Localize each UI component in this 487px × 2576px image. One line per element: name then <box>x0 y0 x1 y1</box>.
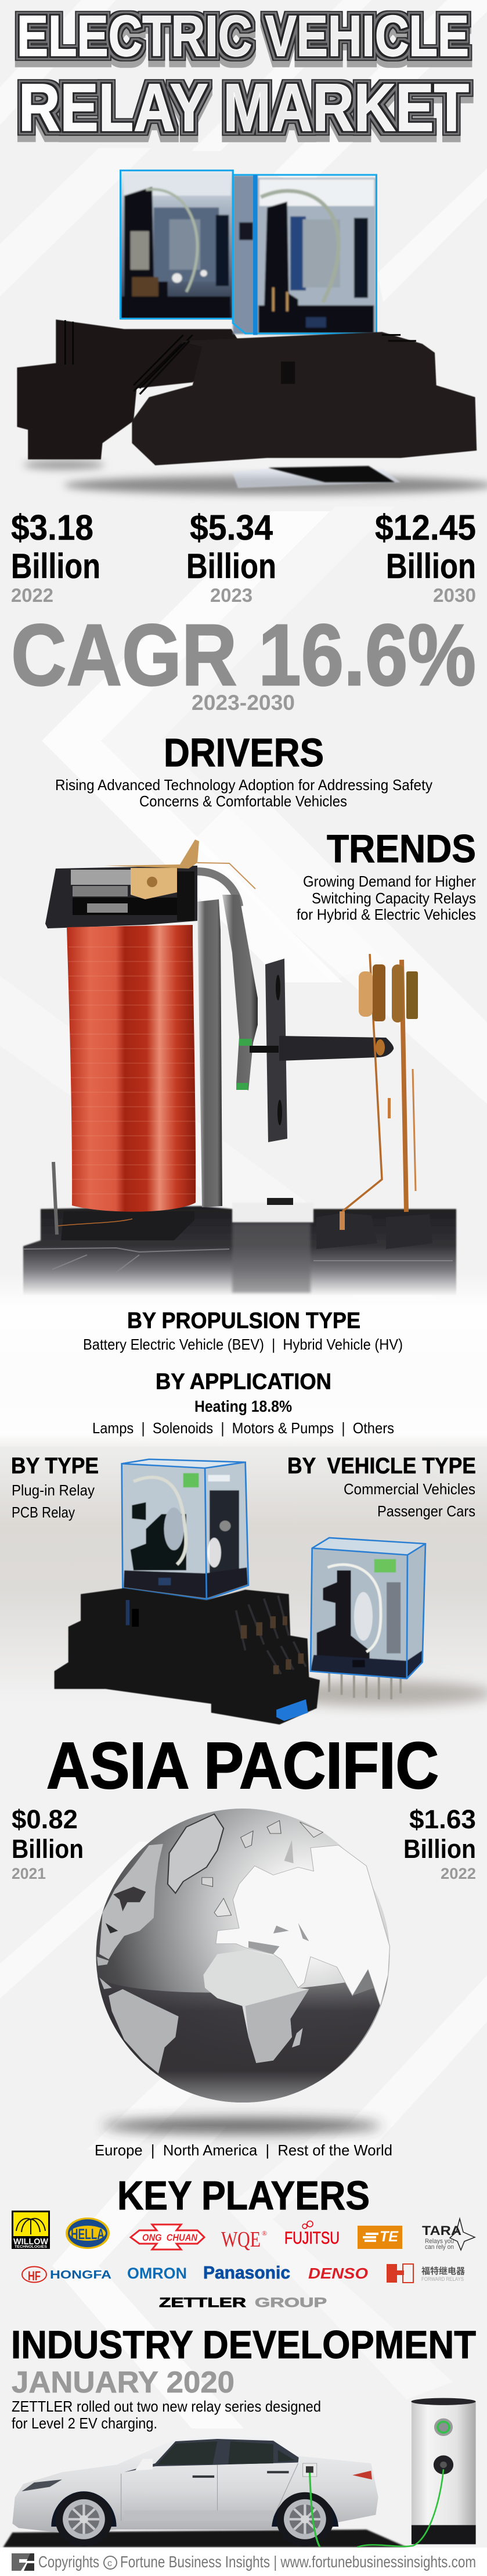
logo: Willow: TECHNOLOGIES <box>15 2245 47 2249</box>
stat: 2030 <box>375 508 476 606</box>
logo: Tara: TARA <box>422 2223 461 2238</box>
image: opened relay coil <box>23 839 456 1295</box>
globe <box>96 1809 390 2133</box>
logo: Fujitsu: FUJITSU <box>284 2229 340 2248</box>
stat: 2022 <box>11 508 100 606</box>
logo: Tara <box>422 2219 475 2251</box>
region heading: ASIA PACIFIC <box>46 1729 439 1802</box>
drivers: Rising Advanced Technology Adoption for Addressing Safety <box>55 776 432 794</box>
trends: TRENDS <box>327 827 476 871</box>
logo: TE <box>358 2226 402 2249</box>
logo: Hella: HELLA <box>71 2226 104 2243</box>
industry development <box>11 2323 476 2432</box>
illustration: car at charger <box>3 2398 476 2547</box>
logo: Willow: WILLOW <box>13 2237 49 2247</box>
footer: c <box>107 2559 112 2568</box>
logo: Zettler Group: GROUP <box>255 2295 327 2310</box>
stat: 2023: $5.34 <box>190 508 273 547</box>
image: two relays on sockets <box>17 170 487 494</box>
logo: Tara: can rely on <box>425 2244 454 2251</box>
industry development: for Level 2 EV charging. <box>12 2414 157 2432</box>
stat: region 2021: $0.82 <box>12 1804 78 1834</box>
logo: Fujitsu <box>284 2221 340 2248</box>
by application: Lamps | Solenoids | Motors & Pumps | Others <box>92 1419 394 1437</box>
stat: 2022: 2022 <box>11 584 53 606</box>
by type: PCB Relay <box>12 1504 75 1521</box>
Eurasia <box>216 1845 389 2006</box>
trends: Growing Demand for Higher <box>303 873 476 890</box>
stat: region 2022: Billion <box>403 1834 476 1864</box>
by application: Heating 18.8% <box>194 1397 292 1415</box>
stat: 2030: $12.45 <box>375 508 476 547</box>
logo: Forward Relays: FORWARD RELAYS <box>421 2276 464 2283</box>
logo: TE: TE <box>380 2229 399 2245</box>
trends: for Hybrid & Electric Vehicles <box>297 906 476 923</box>
CAGR: 2023-2030 <box>192 691 295 715</box>
Greenland <box>168 1814 223 1893</box>
trends <box>297 827 476 923</box>
charger <box>412 2402 476 2527</box>
large relay <box>122 1459 248 1599</box>
front socket <box>132 332 477 465</box>
stat: 2022: Billion <box>11 547 100 586</box>
by propulsion type: Battery Electric Vehicle (BEV) | Hybrid Vehicle (HV) <box>83 1336 403 1353</box>
plate <box>265 959 287 1142</box>
drivers <box>55 730 432 810</box>
logo: Hongfa: HF <box>28 2269 41 2283</box>
cable <box>357 2469 443 2547</box>
iron yoke <box>197 899 222 1207</box>
title <box>17 3 469 145</box>
Central America <box>97 1957 112 1989</box>
logo: Omron: OMRON <box>127 2265 187 2282</box>
by type: Plug-in Relay <box>12 1481 95 1499</box>
by propulsion type <box>83 1308 403 1353</box>
logo: Panasonic: Panasonic <box>203 2262 290 2283</box>
pin <box>250 1046 279 1053</box>
copper coil <box>67 925 196 1212</box>
drivers: DRIVERS <box>164 730 324 775</box>
trends: Switching Capacity Relays <box>312 889 476 907</box>
regions list: Europe | North America | Rest of the World <box>95 2141 392 2159</box>
logo: Zettler Group: ZETTLER <box>159 2295 247 2310</box>
wheels <box>51 2491 338 2527</box>
logo: Forward Relays: 福特继电器 <box>421 2266 465 2276</box>
right relay <box>233 175 376 335</box>
key players heading: KEY PLAYERS <box>117 2173 370 2218</box>
stat: region 2021 <box>12 1804 84 1882</box>
North America <box>99 1844 163 1959</box>
stat: region 2021: Billion <box>12 1834 84 1864</box>
by application <box>92 1369 394 1437</box>
by vehicle type <box>287 1454 476 1520</box>
logo: Hongfa <box>22 2267 111 2283</box>
logo: Song Chuan: ONG CHUAN <box>142 2232 198 2243</box>
stat: 2023: Billion <box>186 547 276 586</box>
stat: 2023 <box>186 508 276 606</box>
back socket <box>17 320 242 460</box>
by vehicle type: Commercial Vehicles <box>344 1480 475 1498</box>
logo: Hongfa: HONGFA <box>50 2269 111 2281</box>
South America <box>109 1989 179 2073</box>
small relay <box>311 1538 425 1699</box>
stat: 2022: $3.18 <box>11 508 93 547</box>
socket <box>55 1588 320 1724</box>
by type: BY TYPE <box>11 1454 99 1479</box>
logo: Zettler Group <box>159 2295 327 2310</box>
by propulsion type: BY PROPULSION TYPE <box>127 1308 360 1333</box>
logo: Willow <box>12 2211 50 2249</box>
industry development: ZETTLER rolled out two new relay series designed <box>12 2398 321 2415</box>
by application: BY APPLICATION <box>156 1369 331 1394</box>
relay base <box>23 1206 456 1295</box>
top frame <box>45 866 197 928</box>
industry development: JANUARY 2020 <box>12 2366 235 2399</box>
Africa <box>203 1950 309 2063</box>
stat: region 2022 <box>403 1804 476 1882</box>
stat: region 2022: $1.63 <box>409 1804 476 1834</box>
car body <box>12 2435 378 2532</box>
by vehicle type: Passenger Cars <box>377 1502 475 1520</box>
stat: 2030: 2030 <box>433 584 476 606</box>
footer <box>0 2548 487 2576</box>
logo: Hella <box>66 2218 110 2249</box>
drivers: Concerns & Comfortable Vehicles <box>139 792 347 810</box>
stat: 2023: 2023 <box>210 584 252 606</box>
footer: Copyrights <box>38 2553 99 2571</box>
contacts <box>342 954 382 1211</box>
logo: WQE: ® <box>262 2229 267 2237</box>
stat: region 2021: 2021 <box>12 1865 46 1882</box>
image: relay photo <box>0 1435 487 1743</box>
logo: Song Chuan <box>131 2225 204 2249</box>
logo: WQE: WQE <box>221 2227 261 2252</box>
logo: Tara: Relays you <box>425 2238 454 2245</box>
left relay <box>121 170 233 318</box>
stat: region 2022: 2022 <box>441 1865 476 1882</box>
by type <box>11 1454 99 1521</box>
logo: Forward Relays <box>387 2264 465 2283</box>
logo: Denso: DENSO <box>308 2265 368 2282</box>
